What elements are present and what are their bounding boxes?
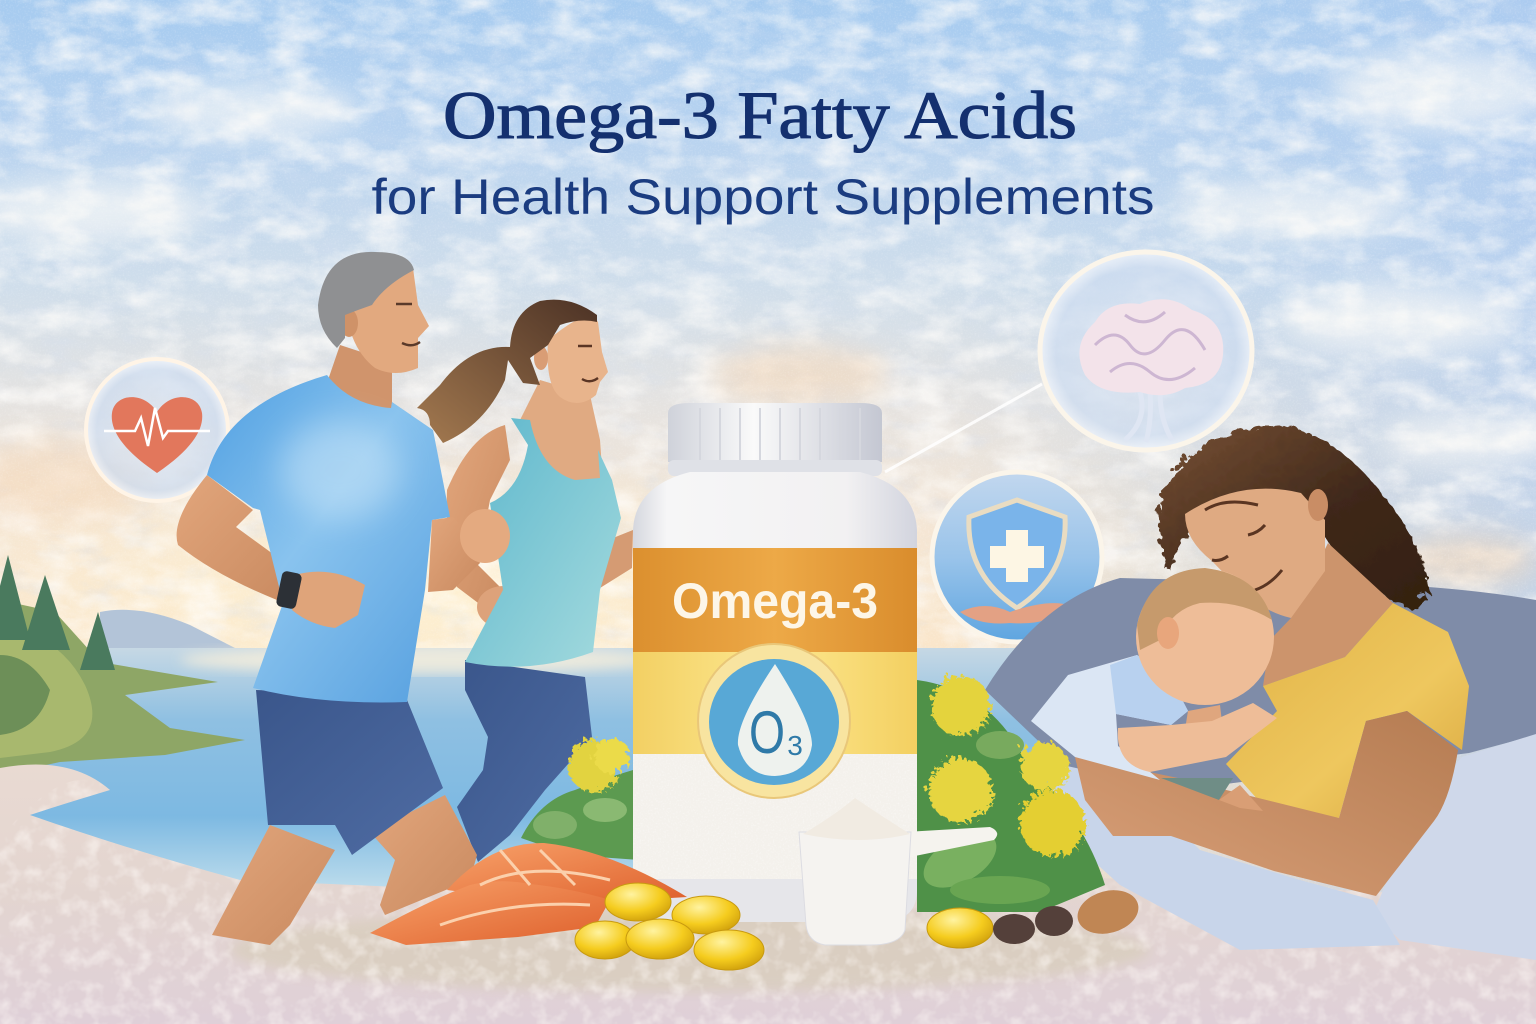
icon: heart with pulse [86,359,228,501]
softgel capsules [575,883,993,970]
woman tank top [465,418,621,667]
bottle body [633,472,917,922]
icon: link line from bottle to brain [885,384,1042,472]
omega-3 badge [698,644,850,798]
omega-3 badge: 3 [787,730,803,761]
baby arm [1118,703,1277,772]
icon: brain in circle [1040,252,1252,450]
bottle label bands [630,548,920,924]
mother arm [1075,711,1458,896]
plant: yellow flowers right of bottle [914,672,1105,912]
man hair [318,252,414,348]
bottle cap [668,403,882,462]
supplement bottle [630,403,920,924]
icon: shield and hands in circle [932,472,1102,642]
man t-shirt [207,375,450,702]
man neck [328,345,392,412]
person: mother holding baby [985,421,1536,960]
subtitle: for Health Support Supplements [372,169,1154,225]
man shirt highlight [280,420,400,520]
man eye and smile [396,304,420,345]
measuring scoop with powder [799,798,997,945]
baby hair [1137,568,1272,650]
woman neck and chest [520,380,603,482]
man shorts [256,690,443,855]
man front arm [428,517,480,592]
woman hand [477,586,529,628]
man fist [460,509,510,563]
woman ear [534,346,548,370]
baby body [1180,705,1226,760]
person: man jogging [177,252,510,945]
man front leg [212,825,335,945]
bottle brand text: Omega-3 [672,573,878,629]
baby blanket and shirt [1031,655,1188,780]
grey pillow [985,578,1536,800]
mother hair [1154,421,1427,607]
man watch [275,570,303,610]
baby sleeve [1110,655,1188,725]
mother face [1185,489,1325,618]
plant: yellow flowers left of bottle [521,734,640,860]
title: Omega-3 Fatty Acids [443,77,1077,153]
mother ear [1308,489,1328,521]
man rear arm [177,475,295,600]
man hand [292,572,365,628]
blanket [1040,760,1400,950]
nuts and seeds [993,884,1143,944]
person: woman jogging [417,300,633,862]
white pillow [1373,734,1536,960]
woman leggings [457,660,592,862]
mother t-shirt [1226,603,1469,818]
woman hair and ponytail [417,300,597,443]
scenery: coastal island with trees [0,555,245,775]
mother features [1205,502,1282,590]
bottle neck [668,460,882,476]
man face [345,268,429,373]
baby ear [1157,617,1179,649]
baby shorts [1161,778,1233,800]
omega-3 badge: O [749,699,785,766]
man ear [340,309,358,337]
baby leg [1219,785,1263,811]
woman face [548,316,608,403]
ground: pebble foreground [0,764,1536,1024]
salmon fillets [370,843,687,945]
woman eye and smile [578,346,598,381]
woman far arm [600,530,633,588]
mother neck and chest [1263,543,1393,686]
man back leg [370,795,477,915]
scenery: sea and horizon [0,610,1060,888]
woman near arm [447,425,510,612]
baby head [1136,569,1274,705]
